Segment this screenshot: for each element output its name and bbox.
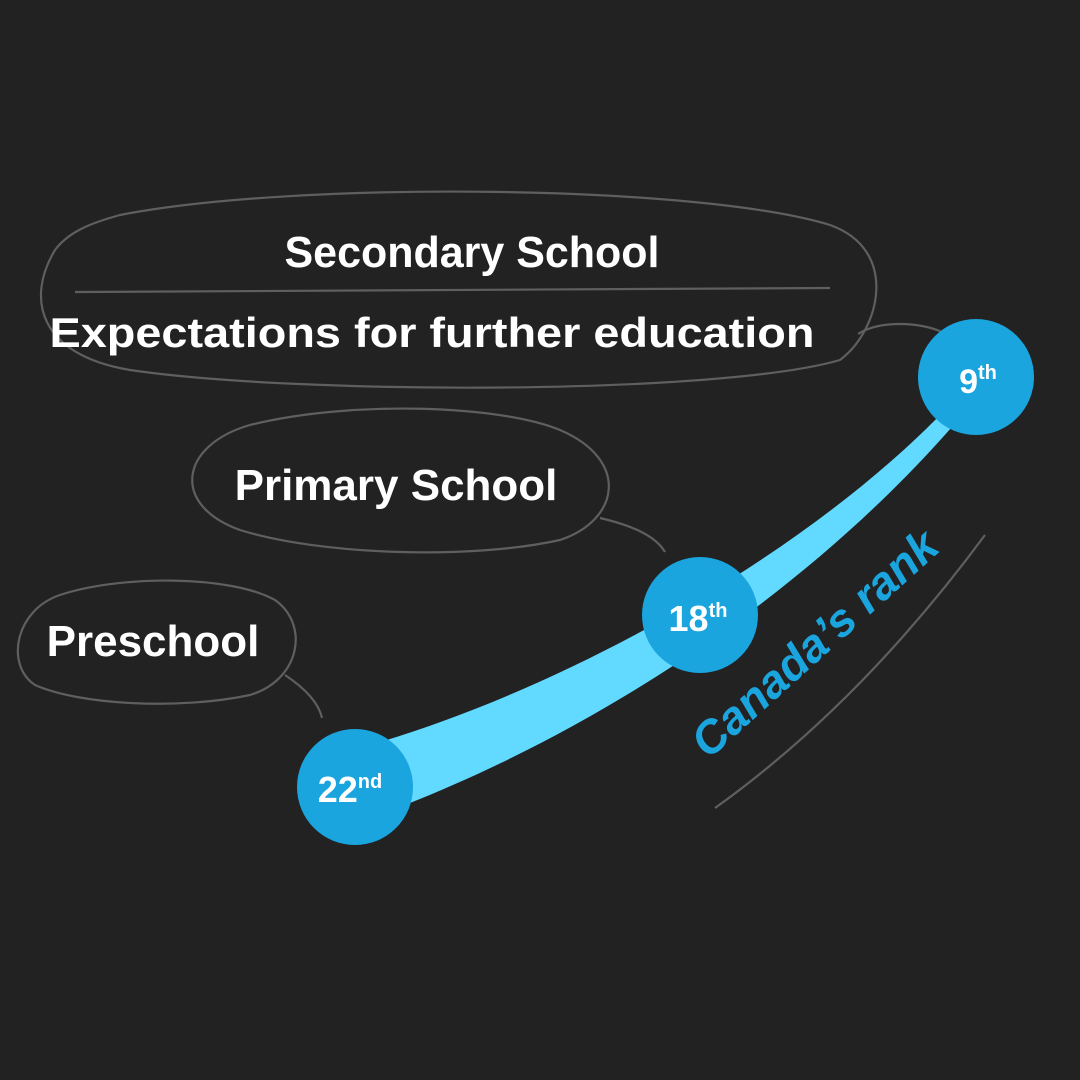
circle: 18th	[642, 557, 758, 673]
circle: 9th	[918, 319, 1034, 435]
heading: secondary school: Secondary School	[284, 228, 660, 277]
circle: 22nd: 22	[318, 769, 358, 810]
circle: 22nd: nd	[358, 771, 382, 793]
text: expectations: Expectations for further education	[50, 309, 814, 356]
bubble: secondary school	[41, 192, 942, 388]
bubble: primary school	[192, 409, 665, 552]
bubble: preschool	[18, 581, 322, 718]
circle: 18th: th	[709, 600, 727, 622]
underline stroke	[715, 535, 985, 808]
circle: 9th: th	[978, 362, 997, 384]
circle: 22nd	[297, 729, 413, 845]
rank band	[370, 410, 958, 805]
heading: primary school: Primary School	[235, 461, 557, 510]
circle: 9th: 9	[959, 363, 978, 401]
label: canada's rank: Canada’s rank	[680, 517, 950, 767]
heading: preschool: Preschool	[47, 617, 259, 666]
circle: 18th: 18	[669, 598, 709, 639]
